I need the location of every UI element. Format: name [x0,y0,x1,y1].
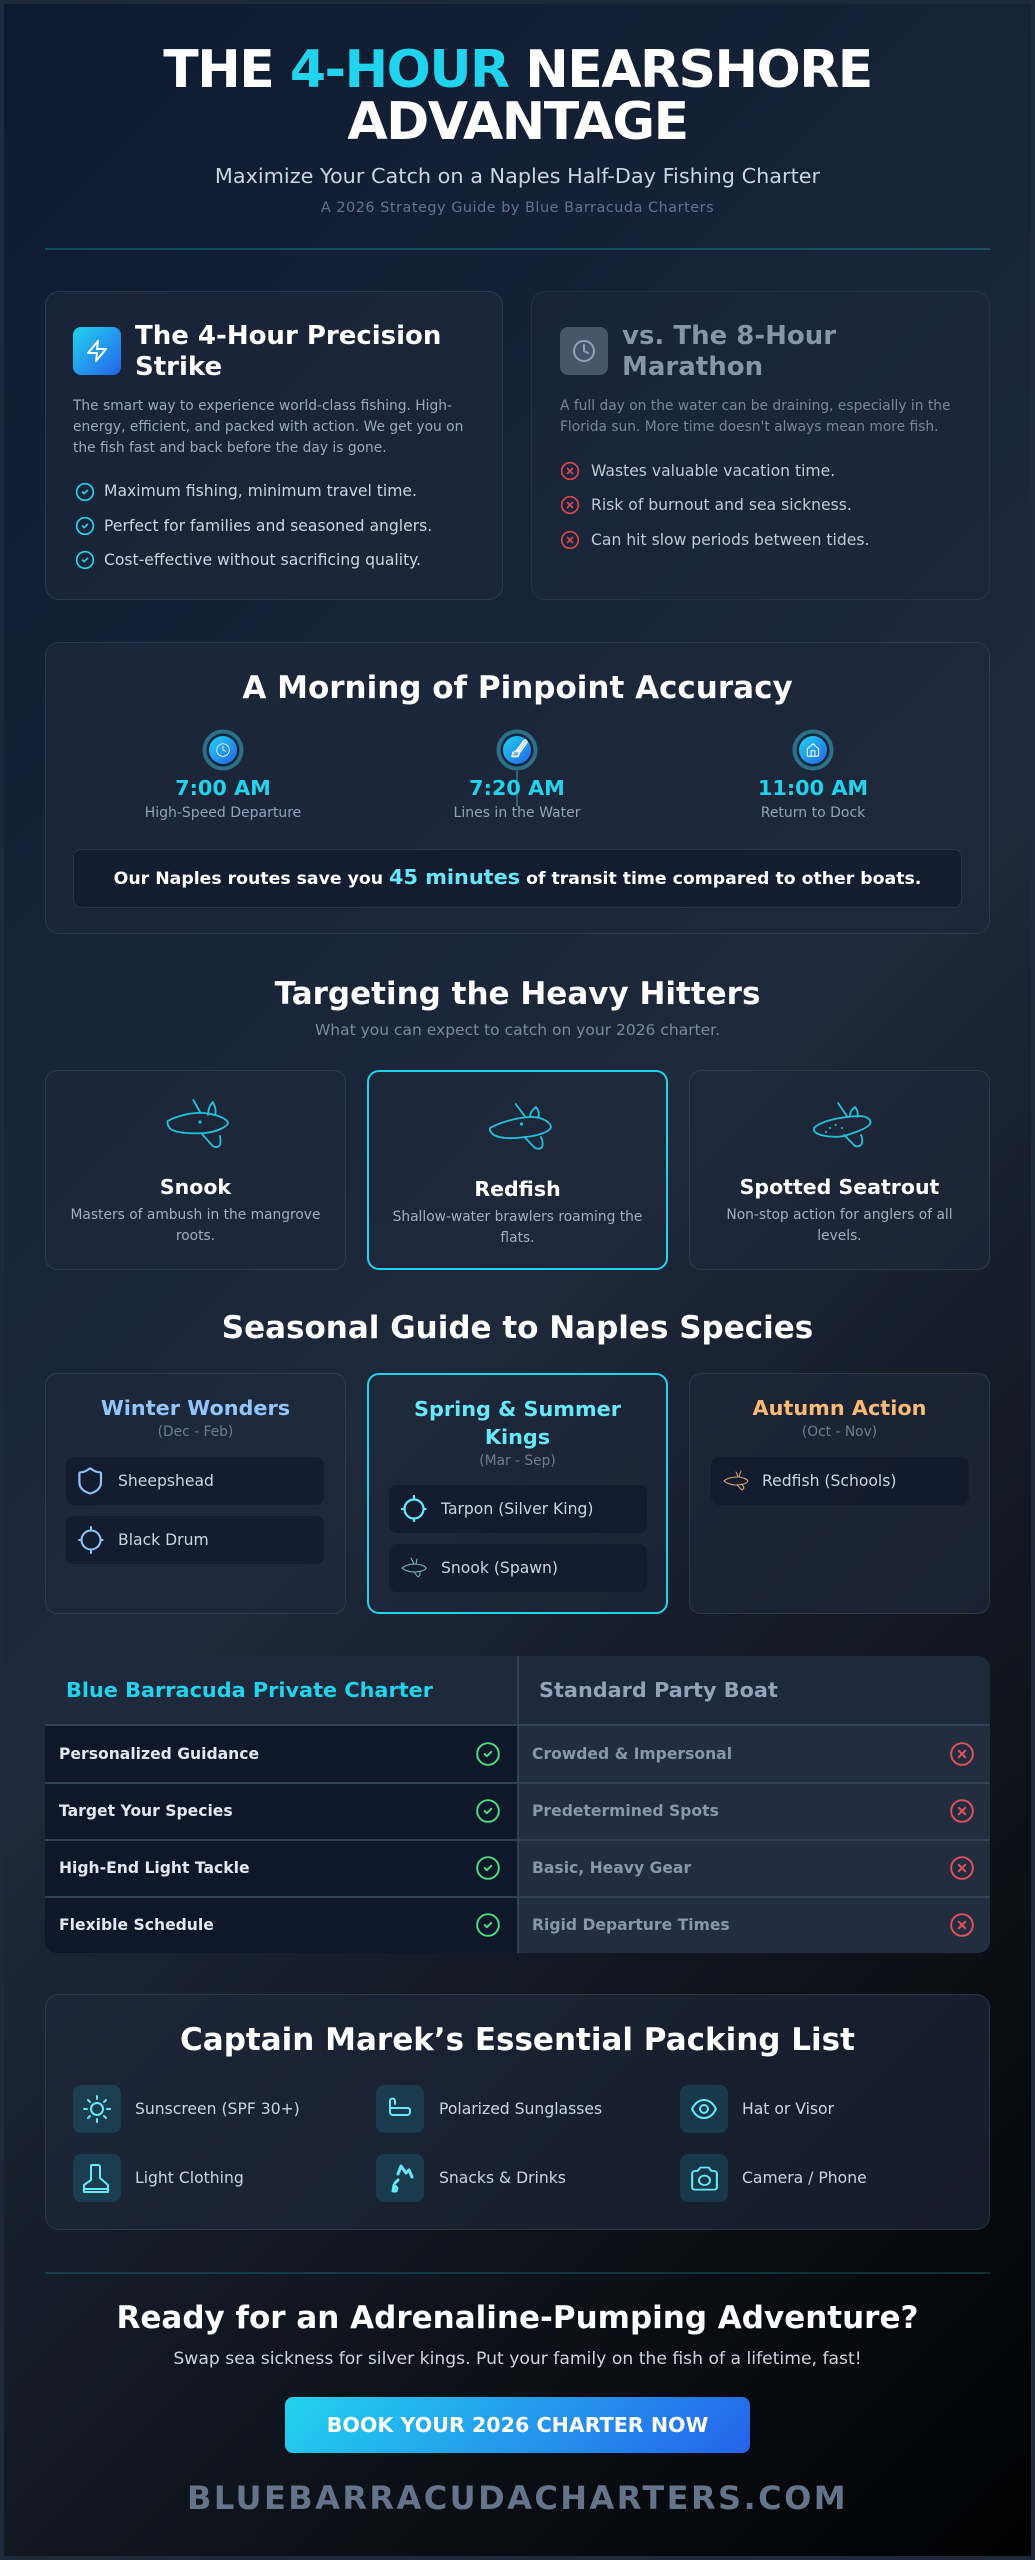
item: snacks and drinks: Snacks & Drinks [439,2169,566,2187]
description [393,1209,642,1246]
description: the fish fast and back before the day is gone. [73,440,387,456]
season title: Spring & Summer [414,1397,621,1421]
title: ADVANTAGE [347,92,688,152]
season title: Autumn Action [753,1396,926,1420]
button: book charter [285,2397,750,2453]
row: light tackle: High-End Light Tackle [59,1859,250,1877]
time: 7:00 AM [175,776,271,800]
season title: Kings [485,1425,550,1449]
item: hat or visor: Hat or Visor [742,2100,834,2118]
subheading: What you can expect to catch on your 2026 charter. [315,1021,720,1039]
season title: Winter Wonders [101,1396,290,1420]
website url: BLUEBARRACUDACHARTERS.COM [187,2479,848,2517]
description: flats. [500,1230,535,1246]
timeline stop: 7:00 AM [145,730,301,821]
heading: heavy hitters: Targeting the Heavy Hitters [275,976,760,1012]
row: light tackle [59,1856,500,1880]
benefit 3: Cost-effective without sacrificing quality. [104,551,421,569]
icon: fish [166,1099,229,1148]
species: tarpon: Tarpon (Silver King) [441,1500,593,1518]
icon: clock [202,730,244,770]
species: sheepshead: Sheepshead [118,1472,214,1490]
icon: fish [813,1102,872,1148]
time: 7:20 AM [469,776,565,800]
row: crowded: Crowded & Impersonal [532,1745,732,1763]
item: sunscreen [73,2085,300,2133]
header: party boat: Standard Party Boat [539,1678,778,1702]
row: personalized guidance: Personalized Guidance [59,1745,259,1763]
item: light clothing: Light Clothing [135,2169,244,2187]
card: autumn [689,1373,990,1614]
season dates: (Dec - Feb) [158,1424,233,1440]
row: crowded [532,1742,974,1766]
row: rigid departure [532,1913,974,1937]
comparison table [45,1656,990,1953]
description: levels. [817,1228,862,1244]
icon: fish [489,1103,552,1150]
card: winter [45,1373,346,1614]
icon: home [792,730,834,770]
name: Spotted Seatrout [740,1175,939,1199]
row: target your species [59,1799,500,1823]
item: snacks and drinks [376,2154,566,2202]
card: redfish [367,1070,668,1270]
subtitle: Maximize Your Catch on a Naples Half-Day Fishing Charter [215,164,820,188]
description: The smart way to experience world-class fishing. High- [73,398,452,414]
species: black drum: Black Drum [118,1531,209,1549]
description: Shallow-water brawlers roaming the [393,1209,642,1225]
icon: clock [560,327,608,375]
species: snook [389,1544,647,1592]
panel: 8-hour marathon [531,291,990,600]
call to action text: Swap sea sickness for silver kings. Put your family on the fish of a lifetime, fast! [173,2349,862,2369]
card: spring and summer [367,1373,668,1614]
heading [622,321,836,382]
species: black drum [66,1516,324,1564]
right column rows [519,1725,990,1953]
callout: transit savings: Our Naples routes save you 45 minutes of transit time compared to other boats. [114,865,921,889]
heading: Captain Marek’s Essential Packing List [180,2022,855,2058]
heading: Marathon [622,352,763,382]
species: tarpon [389,1485,647,1533]
call to action heading: Ready for an Adrenaline-Pumping Adventure? [116,2300,918,2336]
description [71,1207,320,1244]
icon: brush [496,730,538,770]
panel: packing list [45,1994,990,2230]
button: book charter: BOOK YOUR 2026 CHARTER NOW [327,2413,708,2437]
byline: A 2026 Strategy Guide by Blue Barracuda Charters [321,200,714,216]
description: energy, efficient, and packed with action. We get you on [73,419,463,435]
item: camera or phone: Camera / Phone [742,2169,867,2187]
row: basic gear: Basic, Heavy Gear [532,1859,691,1877]
description: Florida sun. More time doesn't always mean more fish. [560,419,939,435]
species: snook: Snook (Spawn) [441,1559,558,1577]
label: Return to Dock [761,805,865,821]
item: hat or visor [680,2085,834,2133]
left column rows [45,1725,517,1953]
description: A full day on the water can be draining, especially in the [560,398,951,414]
heading: seasonal guide: Seasonal Guide to Naples Species [222,1310,813,1346]
benefit 1: Maximum fishing, minimum travel time. [104,482,417,500]
item: sunscreen: Sunscreen (SPF 30+) [135,2100,300,2118]
callout: transit savings [73,849,962,908]
item: camera or phone [680,2154,867,2202]
card: snook [45,1070,346,1270]
description [72,398,463,456]
label: High-Speed Departure [145,805,301,821]
title: THE 4-HOUR NEARSHORE [163,40,872,100]
panel: 4-hour precision strike [45,291,503,600]
title [163,40,872,152]
row: predetermined spots [532,1799,974,1823]
season dates: (Mar - Sep) [479,1453,556,1469]
name: Snook [160,1175,231,1199]
description [560,398,951,435]
label: Lines in the Water [454,805,580,821]
row: flexible schedule [59,1913,500,1937]
header: private charter: Blue Barracuda Private Charter [66,1678,433,1702]
description: Masters of ambush in the mangrove [71,1207,320,1223]
drawback 3: Can hit slow periods between tides. [591,531,869,549]
row: basic gear [532,1856,974,1880]
icon: lightning bolt [73,327,121,375]
benefit 2: Perfect for families and seasoned anglers. [104,517,432,535]
description [726,1207,953,1244]
heading: Strike [135,352,222,382]
drawback 1: Wastes valuable vacation time. [591,462,835,480]
species: redfish: Redfish (Schools) [762,1472,896,1490]
heading [135,321,441,382]
panel: morning timeline [45,642,990,934]
row: target your species: Target Your Species [59,1802,233,1820]
season title [414,1397,621,1449]
timeline stop: 7:20 AM [454,730,580,821]
heading: A Morning of Pinpoint Accuracy [242,670,793,706]
time: 11:00 AM [758,776,868,800]
row: flexible schedule: Flexible Schedule [59,1916,214,1934]
description: Non-stop action for anglers of all [726,1207,953,1223]
name: Redfish [474,1177,561,1201]
species: sheepshead [66,1457,324,1505]
item: sunglasses [376,2085,602,2133]
row: rigid departure: Rigid Departure Times [532,1916,730,1934]
season dates: (Oct - Nov) [802,1424,877,1440]
drawback 2: Risk of burnout and sea sickness. [591,496,852,514]
item: light clothing [73,2154,244,2202]
species: redfish [711,1457,969,1505]
heading: The 4-Hour Precision [135,321,441,351]
row: personalized guidance [59,1742,500,1766]
description: roots. [176,1228,215,1244]
timeline stop: 11:00 AM [758,730,868,821]
heading: vs. The 8-Hour [622,321,836,351]
benefits list [76,482,432,570]
card: spotted seatrout [689,1070,990,1270]
item: sunglasses: Polarized Sunglasses [439,2100,602,2118]
row: predetermined spots: Predetermined Spots [532,1802,719,1820]
drawbacks list [560,462,869,550]
